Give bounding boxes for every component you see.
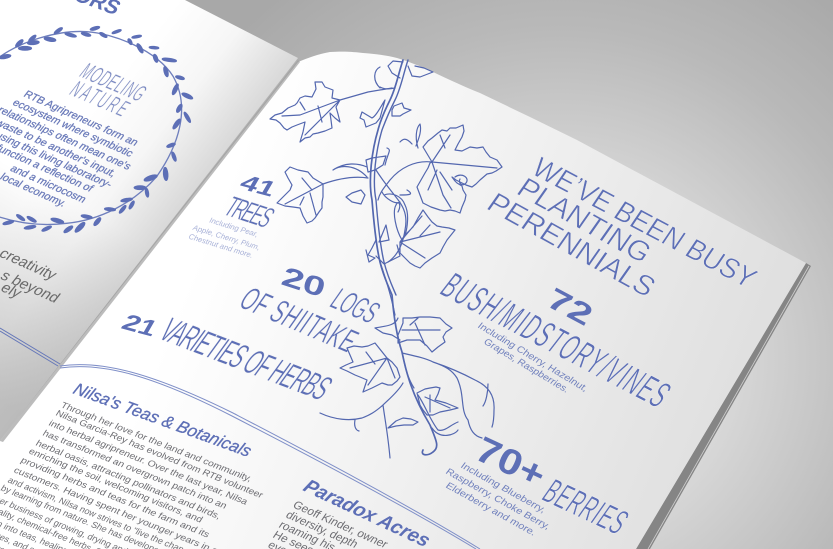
stat: 70+ berries: Raspberry, Choke Berry,: [443, 467, 552, 532]
stat: 20 logs of shiitake: [233, 261, 386, 359]
stat: 41 trees: Including Pear,: [208, 216, 259, 239]
article body: Nilsa: enriching the soil, welcoming visitors, and: [27, 446, 205, 524]
leaf: top cluster: [375, 61, 433, 89]
wreath heading: Modeling Nature: [64, 59, 152, 122]
article body: Nilsa: into herbal agripreneur. Over the last year, Nilsa: [47, 418, 251, 507]
stat: 41 trees: Chestnut and more.: [188, 232, 254, 260]
wreath: [0, 25, 194, 234]
stat: 70+ berries: 70+: [470, 428, 552, 496]
panel: left page: [0, 0, 298, 441]
tendril coil: [376, 170, 411, 262]
leaf: center grape leaf: [400, 210, 455, 268]
leaf: small lower leaves: [388, 387, 458, 428]
wreath body text: RTB Agripreneurs form an: [21, 89, 141, 148]
left page paragraph fragment: [0, 246, 63, 306]
stat: 20 logs of shiitake: OF SHIITAKE: [233, 280, 365, 359]
curved divider rule: [60, 365, 480, 549]
title: WE’VE BEEN BUSY: [526, 152, 762, 295]
stat: 70+ berries: Elderberry and more.: [443, 481, 538, 538]
stat: 70+ berries: BERRIES: [535, 473, 635, 542]
stat: 41 trees: [188, 170, 281, 260]
article body: Nilsa: [0, 400, 265, 549]
title: PLANTING: [511, 172, 657, 270]
article heading: Nilsa's Teas & Botanicals: Nilsa's Teas & Botanicals: [70, 380, 255, 461]
stat: 72 bush/midstory/vines: BUSH/MIDSTORY/VINES: [433, 266, 679, 415]
leaf: lower right: [375, 317, 452, 352]
leaf: large right grape leaf: [417, 125, 502, 213]
stat: 21 varieties of herbs: 21: [117, 310, 163, 341]
title: PERENNIALS: [481, 187, 661, 303]
stat: 21 varieties of herbs: VARIETIES OF HERBS: [152, 312, 339, 408]
leaf: top-left maple: [270, 82, 392, 142]
leaf: left trees leaf: [277, 167, 368, 223]
wreath heading: Modeling Nature: NATURE: [64, 77, 135, 122]
wreath body text: [0, 89, 141, 209]
illustration: grapevine: [270, 60, 502, 458]
stat: 20 logs of shiitake: 20: [278, 261, 329, 303]
wreath heading: Modeling Nature: MODELING: [74, 59, 152, 107]
left page double rule: [0, 328, 60, 366]
leaf: lower left maple: [340, 343, 400, 392]
article body: Nilsa: herbal oasis, attracting pollinators and birds,: [34, 438, 223, 521]
stat: 70+ berries: Including Blueberry,: [458, 461, 548, 515]
article body: Nilsa: Through her love for the land and community,: [59, 400, 254, 483]
stat: 72 bush/midstory/vines: Grapes, Raspberries.: [481, 337, 571, 395]
wreath body text: ecosystem where symbiotic: [10, 97, 136, 160]
stat: 41 trees: Apple, Cherry, Plum,: [191, 223, 261, 252]
article body: Nilsa: providing herbs and teas for the farm and its: [19, 455, 212, 540]
stat: 41 trees: TREES: [218, 192, 280, 234]
article body: Nilsa: Nilsa Garcia-Rey has evolved from RTB volunteer: [54, 408, 265, 500]
vine stem: [370, 60, 437, 455]
wreath body text: and a microcosm: [7, 163, 89, 205]
stat: 72 bush/midstory/vines: Including Cherry, Hazelnut,: [475, 321, 590, 394]
article body: Nilsa: has transformed an overgrown patch into an: [41, 428, 229, 511]
stat: 41 trees: 41: [235, 170, 281, 201]
stat: 72 bush/midstory/vines: 72: [542, 282, 598, 333]
stat: 20 logs of shiitake: LOGS: [324, 283, 386, 330]
stat: 70+ berries: [443, 428, 635, 542]
panel: right page edge thickness: [636, 263, 811, 549]
tendrils and branches: [320, 353, 494, 458]
article body: Nilsa: customers. Having spent her younger years in art: [12, 465, 226, 549]
